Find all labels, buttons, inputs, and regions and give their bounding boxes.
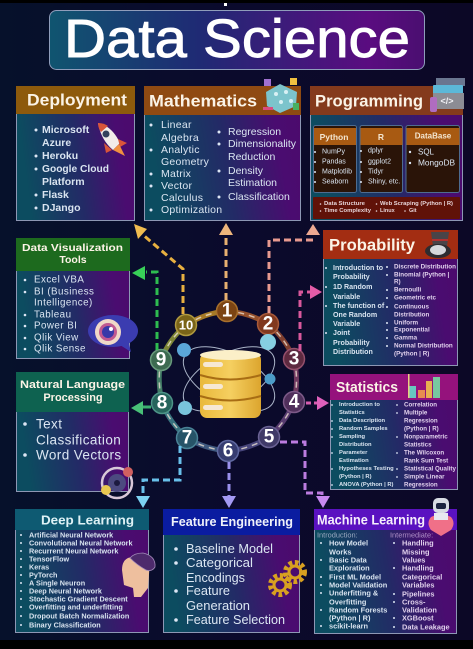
list: Mathematics right: Regression (228, 126, 281, 138)
list: Machine Learning intermediate: Missing (402, 548, 430, 556)
panel: Deep Learning (15, 509, 155, 632)
list: Data Visualization Tools: BI (Business (34, 286, 94, 298)
list: Deep Learning: Recurrent Neural Network (29, 546, 119, 556)
box: other programming topics: Linux (380, 208, 396, 214)
node 6: 6 (223, 440, 233, 462)
box: other programming topics: Time Complexity (324, 208, 372, 214)
list: Mathematics left: Geometry (161, 156, 210, 168)
list: Statistics left: (Python | R) (339, 474, 372, 480)
node 8: 8 (157, 392, 167, 414)
box: other programming topics: Git (409, 208, 417, 214)
list: Machine Learning intermediate: Handling (402, 538, 434, 548)
list: Deployment: Platform (42, 176, 85, 188)
list: Probability left: Joint (333, 329, 351, 337)
sub-panel: Python (314, 126, 356, 192)
list: Deployment (34, 124, 109, 214)
sub-panel: R: dplyr (368, 148, 384, 154)
heading: Data Visualization Tools: Data Visualization (22, 242, 123, 254)
node 1: 1 (222, 300, 233, 322)
list: Mathematics left (150, 119, 222, 216)
list: Machine Learning intermediate: Pipelines (402, 590, 434, 598)
list: Probability right: Uniform (394, 320, 419, 326)
list: Deep Learning: PyTorch (29, 570, 57, 580)
list: Deep Learning: Convolutional Neural Network (29, 538, 133, 548)
list: Statistics right: Correlation (404, 402, 437, 408)
heading: Natural Language Processing: Natural Language (20, 379, 125, 391)
list: Mathematics left: Calculus (161, 192, 203, 204)
heading: Programming: Programming (315, 92, 423, 110)
list: Statistics right: Nonparametric (404, 434, 448, 440)
sub-panel: DataBase (406, 126, 460, 192)
list: Deep Learning: Overfitting and underfitting (29, 602, 123, 612)
list: Machine Learning introduction: Overfitting (329, 598, 367, 606)
icon: robot with heart (428, 498, 454, 536)
list: Data Visualization Tools: Tableau (34, 310, 71, 320)
heading: Feature Engineering (163, 509, 300, 535)
list: Machine Learning introduction: Exploration (329, 564, 370, 572)
node 3 (284, 348, 304, 370)
list: Mathematics right: Reduction (228, 151, 275, 163)
list: Machine Learning intermediate: Variables (402, 580, 434, 590)
list: Mathematics right: Density (228, 165, 264, 177)
icon: gear cycle (101, 467, 133, 498)
list: Statistics right: Regression (404, 418, 438, 424)
list: Mathematics left: Vector (161, 180, 193, 192)
arrow 6 to Feature Engineering (222, 462, 236, 508)
list: Statistics left: ANOVA (Python | R) (339, 482, 394, 488)
list: Data Visualization Tools: Power BI (34, 320, 77, 332)
sub-panel: Python: NumPy (322, 148, 345, 156)
sub-panel: R: ggplot2 (368, 158, 391, 166)
list: Natural Language Processing (23, 416, 122, 462)
panel: Statistics (330, 374, 458, 490)
list: Mathematics right: Classification (228, 191, 290, 203)
list: Mathematics right: Dimensionality (228, 138, 297, 150)
list: Deployment: Google Cloud (42, 163, 109, 175)
list: Machine Learning intermediate: Validation (402, 606, 437, 614)
list: Machine Learning introduction: First ML Model (329, 572, 381, 582)
arrow 1 to Mathematics (219, 223, 233, 300)
list: Probability left: Distribution (333, 348, 373, 356)
node 4: 4 (289, 392, 300, 412)
arrow 10 to Deployment (134, 224, 183, 314)
list: Statistics right: Regression (404, 482, 438, 488)
heading: Natural Language Processing: Processing (43, 392, 103, 404)
list: Probability left: Probability (333, 273, 370, 281)
list: Statistics left: Data Description (339, 418, 386, 424)
list: Machine Learning intermediate: Categorical (402, 572, 442, 582)
list: Statistics right: Multiple (404, 410, 428, 416)
list: Natural Language Processing: Text (36, 416, 62, 432)
list: Machine Learning intermediate: Intermediate: (390, 530, 433, 540)
panel: Feature Engineering (163, 509, 304, 632)
list: Deep Learning (20, 530, 133, 630)
list: Feature Engineering: Encodings (186, 571, 245, 585)
heading: Mathematics: Mathematics (149, 92, 257, 110)
list: Machine Learning introduction: (Python | R) (329, 614, 371, 622)
list: Machine Learning introduction: Basic Data (329, 556, 368, 564)
list: Machine Learning intermediate: Values (402, 556, 425, 564)
panel: Machine Learning (314, 498, 457, 634)
icon: head with brain (122, 553, 155, 597)
sub-panel: Python: Seaborn (322, 178, 349, 186)
list: Deep Learning: TensorFlow (29, 554, 70, 564)
node 5: 5 (264, 426, 275, 448)
box: other programming topics: Web Scraping (Python | R) (380, 201, 453, 207)
icon: bar chart (408, 374, 440, 398)
list: Feature Engineering (174, 542, 285, 627)
list: Data Visualization Tools: Qlik View (34, 332, 79, 344)
list: Statistics left: Hypotheses Testing (339, 466, 394, 472)
icon: eye bubble (88, 315, 138, 352)
list: Data Visualization Tools (24, 274, 94, 354)
list: Machine Learning introduction: How Model (329, 538, 368, 548)
panel: Data Visualization Tools (16, 238, 138, 358)
heading: Data Visualization Tools: Tools (59, 254, 87, 266)
sub-panel: DataBase: MongoDB (418, 158, 455, 168)
heading: Natural Language Processing (16, 372, 129, 412)
list: Statistics left (331, 402, 394, 488)
heading: Statistics: Statistics (336, 380, 398, 396)
panel: Natural Language Processing (16, 372, 133, 498)
heading: Probability: Probability (329, 236, 416, 254)
arrow 8 to Natural Language Processing (131, 401, 151, 415)
node 6 (218, 440, 238, 462)
arrow 9 to Data Visualization Tools (132, 266, 157, 350)
list: Probability left: Probability (333, 339, 370, 347)
list: Statistics right: Statistics (404, 442, 432, 448)
icon: math cube (263, 78, 299, 113)
list: Probability right: Discrete Distribution (394, 264, 456, 270)
sub-panel: R: Shiny, etc. (368, 178, 400, 186)
list: Statistics left: Parameter (339, 450, 368, 456)
list: Statistics right: Statistical Quality (404, 466, 456, 472)
node 9 (150, 350, 172, 370)
list: Deployment: DJango (42, 202, 81, 214)
arrow 5 to Machine Learning (280, 442, 330, 508)
central ring with numbered nodes (150, 300, 304, 462)
list: Statistics right: (Python | R) (404, 426, 439, 432)
list: Machine Learning intermediate: Data Leakage (402, 622, 450, 632)
icon: code window: </> (440, 96, 454, 106)
sub-panel: Python: Python (320, 132, 348, 142)
list: Feature Engineering: Feature Selection (186, 613, 285, 627)
list: Statistics right: The Wilcoxon (404, 450, 444, 456)
icon: gears (271, 563, 304, 594)
arrow 7 to Deep Learning (136, 446, 180, 508)
node 3: 3 (289, 348, 299, 370)
list: Deployment: Heroku (42, 150, 78, 162)
list: Machine Learning intermediate: Handling (402, 564, 434, 572)
heading: Data Visualization Tools (16, 238, 130, 271)
sub-panel: R: Tidyr (368, 168, 384, 176)
list: Probability right: Continuous (394, 304, 429, 310)
list: Mathematics right (218, 126, 297, 203)
list: Deep Learning: A Single Neuron (29, 578, 85, 588)
list: Mathematics right: Estimation (228, 177, 277, 189)
list: Statistics left: Distribution (339, 442, 372, 448)
sub-panel: R: R (378, 132, 384, 142)
list: Probability left: Variable (333, 293, 360, 301)
list: Natural Language Processing: Word Vectors (36, 448, 122, 462)
heading: Deep Learning: Deep Learning (41, 512, 134, 528)
list: Machine Learning intermediate: Cross- (402, 598, 426, 606)
arrow 3 to Probability (300, 285, 322, 351)
list: Statistics left: Introduction to (339, 402, 380, 408)
sub-panel: DataBase: SQL (418, 148, 435, 156)
list: Probability right: Exponential (394, 326, 430, 334)
sub-panel: R (360, 126, 402, 192)
node 10 (176, 314, 196, 336)
box: other programming topics: Data Structure (324, 201, 365, 207)
panel: Programming (310, 78, 465, 220)
list: Statistics right (396, 402, 456, 488)
panel: Deployment (16, 86, 135, 220)
list: Statistics left: Statistics (339, 410, 365, 416)
sub-panel: Python: Pandas (322, 158, 346, 166)
list: Probability right: Bernoulli (394, 286, 422, 294)
heading: Programming (310, 86, 463, 115)
node 5 (258, 426, 280, 448)
list: Deployment: Microsoft (42, 124, 90, 136)
list: Probability left: 1D Random (333, 283, 372, 291)
heading: Mathematics (144, 86, 301, 115)
list: Data Visualization Tools: Intelligence) (34, 298, 93, 308)
list: Statistics left: Estimation (339, 458, 369, 464)
node 4 (284, 392, 304, 412)
list: Feature Engineering: Categorical (186, 556, 253, 570)
arrow 4 to Statistics (306, 396, 329, 410)
heading: Machine Learning: Machine Learning (317, 512, 425, 528)
node 9: 9 (156, 350, 166, 370)
list: Probability right: Binomial (Python | (394, 272, 450, 278)
list: Machine Learning introduction: Model Validation (329, 580, 388, 590)
list: Data Visualization Tools: Qlik Sense (34, 344, 86, 354)
list: Deep Learning: Deep Neural Network (29, 586, 103, 596)
panel: Probability (323, 230, 458, 366)
sub-panel: Python: Matplotlib (322, 168, 352, 176)
node 8 (152, 392, 172, 414)
list: Deep Learning: Keras (29, 562, 49, 572)
heading: Deep Learning (15, 509, 149, 530)
list: Deep Learning: Stochastic Gradient Descent (29, 594, 128, 604)
sub-panel: DataBase: DataBase (415, 132, 452, 140)
node 7: 7 (182, 428, 192, 448)
list: Probability left: Introduction to (333, 264, 384, 272)
heading: Deployment: Deployment (27, 90, 127, 110)
heading: Machine Learning (314, 509, 457, 530)
list: Probability left: The function of (333, 302, 385, 310)
list: Machine Learning introduction: Introduction: (317, 530, 358, 540)
node 2 (258, 314, 278, 334)
icon: hat with dice (425, 232, 451, 258)
icon: rocket (98, 123, 127, 156)
heading: Feature Engineering: Feature Engineering (171, 515, 293, 529)
list: Probability right: Geometric etc (394, 294, 436, 302)
list: Probability right: Distribution (394, 312, 429, 318)
list: Data Visualization Tools: Excel VBA (34, 274, 84, 286)
title banner: Data Science (64, 9, 410, 69)
list: Statistics left: Random Samples (339, 426, 388, 432)
database icon with orbits (173, 333, 285, 425)
ring segments (159, 311, 296, 451)
list: Mathematics left: Linear (161, 119, 192, 131)
list: Statistics right: Rank Sum Test (404, 458, 448, 464)
list: Mathematics left: Algebra (161, 132, 199, 144)
list: Probability right: R) (394, 278, 401, 286)
panel: Mathematics (144, 78, 301, 220)
list: Deep Learning: Dropout Batch Normalization (29, 612, 129, 620)
list: Feature Engineering: Generation (186, 599, 250, 613)
list: Machine Learning intermediate (390, 530, 450, 632)
list: Deep Learning: Binary Classification (29, 620, 101, 630)
list: Deployment: Azure (42, 137, 71, 149)
list: Mathematics left: Matrix (161, 168, 192, 180)
list: Machine Learning intermediate: XGBoost (402, 614, 434, 622)
list: Deep Learning: Artificial Neural Network (29, 530, 114, 540)
list: Probability left: Variable (333, 320, 360, 328)
list: Deployment: Flask (42, 189, 69, 201)
list: Machine Learning introduction: scikit-learn (329, 622, 369, 630)
list: Machine Learning introduction: Underfitting & (329, 588, 379, 598)
icon: code window (430, 78, 465, 112)
node 2: 2 (263, 314, 273, 334)
node 10: 10 (179, 318, 193, 332)
list: Feature Engineering: Feature (186, 584, 230, 598)
list: Machine Learning introduction: Random Forests (329, 606, 387, 614)
list: Machine Learning introduction: Works (329, 548, 351, 556)
list: Mathematics left: Analytic (161, 144, 200, 156)
list: Natural Language Processing: Classification (36, 432, 121, 448)
box: other programming topics (313, 197, 460, 219)
list: Probability right: (Python | R) (394, 350, 429, 358)
list: Feature Engineering: Baseline Model (186, 542, 273, 556)
list: Probability left: One Random (333, 311, 377, 319)
node 7 (176, 428, 198, 448)
node 1 (216, 300, 238, 322)
list: Mathematics left: Optimization (161, 204, 222, 216)
list: Probability right (386, 264, 456, 358)
arrow 2 to Probability (269, 224, 320, 313)
list: Statistics right: Simple Linear (404, 474, 445, 480)
list: Probability right: Gamma (394, 334, 418, 342)
list: Statistics left: Sampling (339, 434, 366, 440)
list: Machine Learning introduction (317, 530, 388, 630)
list: Probability right: Normal Distribution (394, 342, 453, 350)
list: Probability left (325, 264, 385, 356)
